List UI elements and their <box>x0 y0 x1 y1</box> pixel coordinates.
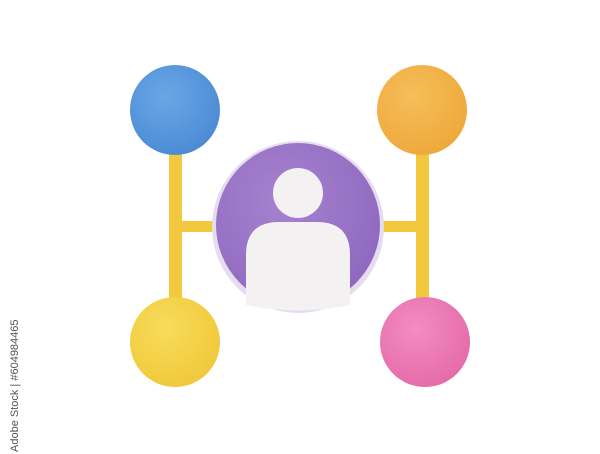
watermark text: Adobe Stock | #604984465 <box>9 319 21 452</box>
node: blue <box>130 65 220 155</box>
node: orange <box>377 65 467 155</box>
icon: person <box>246 168 350 310</box>
node: yellow <box>130 297 220 387</box>
connectors <box>169 150 429 310</box>
node: pink <box>380 297 470 387</box>
central user node <box>212 141 384 313</box>
